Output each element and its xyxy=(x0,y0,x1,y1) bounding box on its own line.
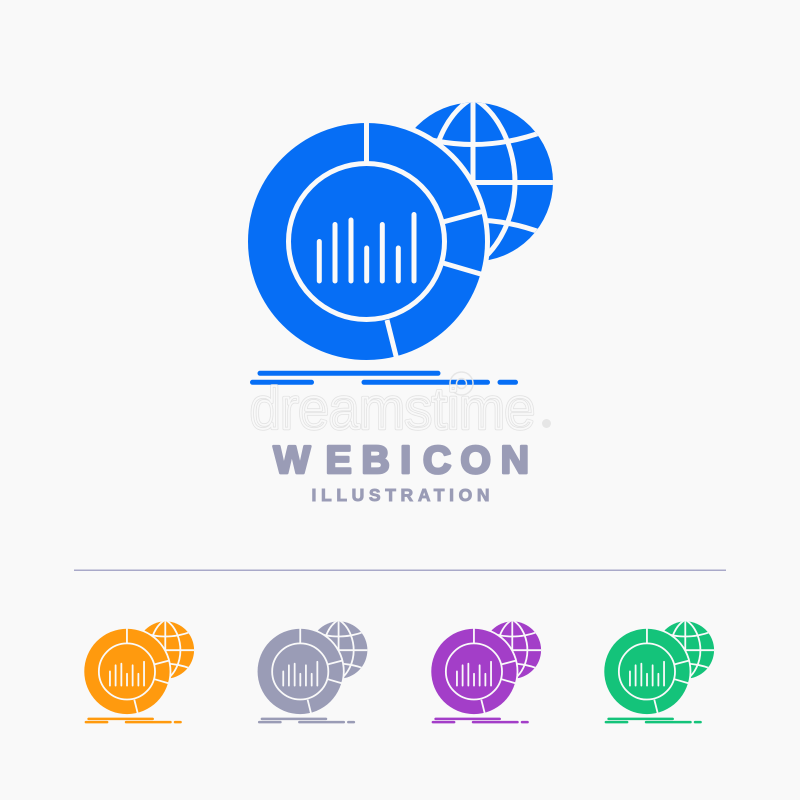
icon: purple variant xyxy=(429,620,542,722)
subtitle: ILLUSTRATION xyxy=(312,485,490,505)
watermark: dreamstime xyxy=(250,376,535,442)
infographic canvas xyxy=(74,102,726,724)
icon: orange variant xyxy=(82,620,195,722)
icon: green variant xyxy=(602,620,715,722)
watermark: dreamstime xyxy=(250,376,535,442)
main icon: pie chart and globe xyxy=(243,98,556,382)
title: WEBICON xyxy=(274,439,529,482)
divider xyxy=(74,570,726,571)
icon: gray variant xyxy=(256,620,368,722)
